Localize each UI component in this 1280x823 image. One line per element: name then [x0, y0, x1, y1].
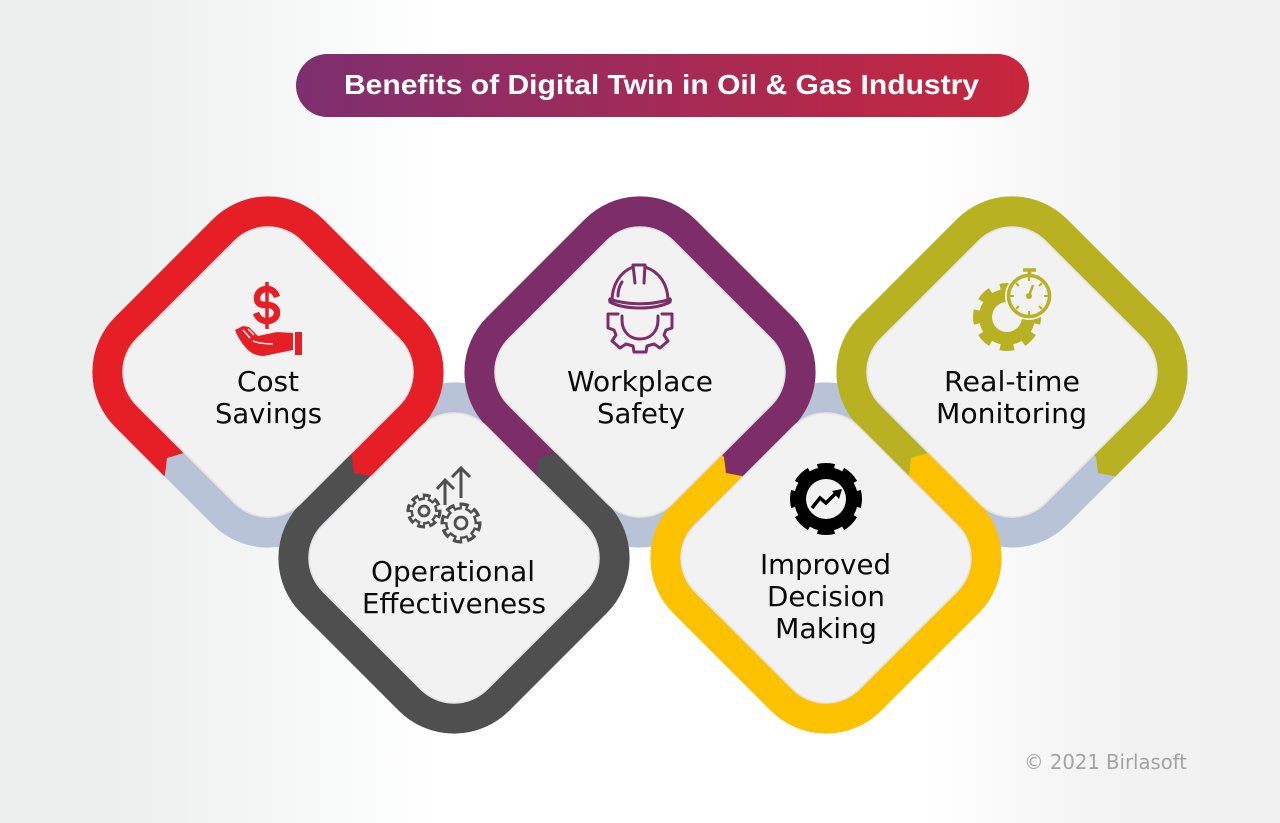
- panel: real-time monitoring: [848, 208, 1176, 536]
- ring: improved decision making (yellow): [650, 452, 1002, 734]
- icon: hard hat and gear: [608, 265, 672, 352]
- panel: workplace safety: [476, 208, 804, 536]
- icon: dollar in hand: [235, 282, 302, 356]
- title banner: [296, 54, 1029, 117]
- panel: cost savings: [104, 208, 432, 536]
- panel: operational effectiveness: [290, 394, 618, 722]
- ring: workplace safety (purple): [464, 196, 816, 482]
- ring: cost savings (red): [92, 196, 444, 476]
- title banner: Benefits of Digital Twin in Oil & Gas Industry: [344, 69, 979, 100]
- label: safety: Safety: [597, 397, 685, 430]
- copyright: © 2021 Birlasoft: [1024, 750, 1187, 774]
- label: operational: Operational: [371, 555, 535, 588]
- label: savings: Savings: [215, 397, 322, 430]
- label: improved: Improved: [760, 548, 891, 581]
- icon: gear with growth arrow: [793, 466, 859, 532]
- label: decision: Decision: [767, 580, 885, 613]
- ring: operational effectiveness (dark grey): [278, 452, 630, 734]
- label: workplace: Workplace: [567, 365, 713, 398]
- label: monitoring: Monitoring: [936, 397, 1087, 430]
- panel: improved decision making: [662, 394, 990, 722]
- label: real-time: Real-time: [944, 365, 1080, 398]
- icon: gears with arrows: [409, 468, 478, 540]
- label: making: Making: [775, 612, 877, 645]
- ring: real-time monitoring (olive): [836, 196, 1188, 482]
- label: effectiveness: Effectiveness: [362, 587, 546, 620]
- icon: gear and stopwatch: [978, 270, 1053, 346]
- connector rings in blue-grey: [81, 185, 1199, 745]
- label: cost savings: Cost: [237, 365, 299, 398]
